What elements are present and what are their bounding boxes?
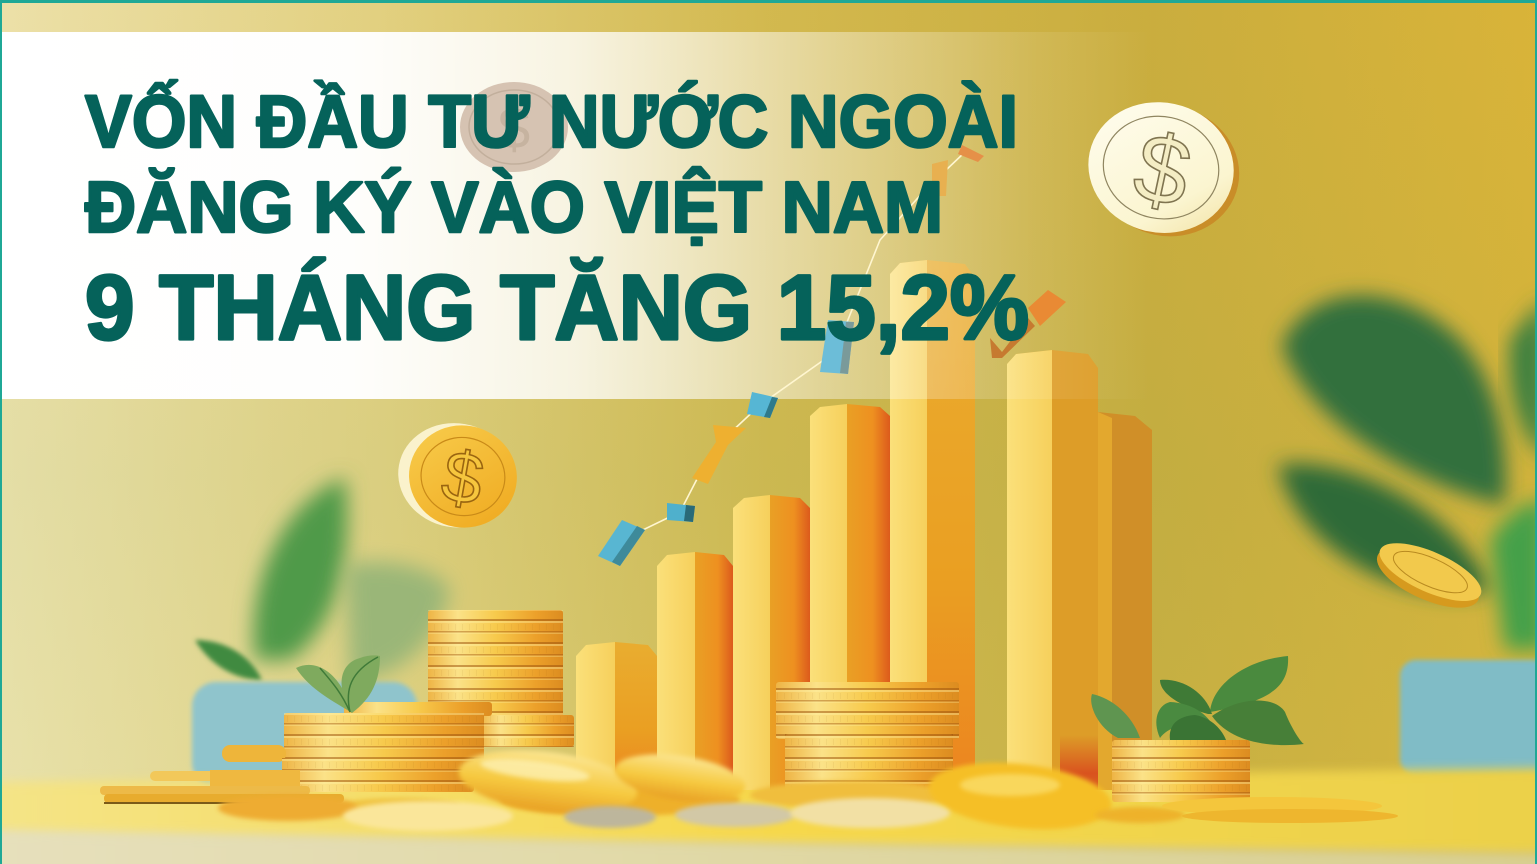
floating coin cream	[1076, 89, 1252, 250]
title panel	[0, 32, 1150, 399]
floating coin faded	[460, 82, 568, 172]
block 2	[667, 503, 695, 522]
title line 2: ĐĂNG KÝ VÀO VIỆT NAM	[85, 167, 943, 248]
title	[85, 80, 1029, 359]
coin stack tall	[428, 610, 574, 747]
floating coin gold	[390, 414, 525, 537]
column 5	[890, 260, 975, 790]
column 1	[576, 642, 657, 790]
sprout on left stack	[296, 655, 380, 713]
block 7 orange	[932, 160, 948, 196]
sprout on right stack	[1091, 656, 1304, 745]
block 6 orange	[1028, 290, 1066, 326]
block 5 orange	[692, 425, 746, 484]
floating coin tilted	[1369, 531, 1489, 620]
block 4	[820, 320, 854, 374]
blurred plant left	[192, 478, 450, 787]
foreground coins	[218, 741, 1398, 837]
floating coin faded: $	[498, 96, 530, 161]
table top	[0, 768, 1537, 855]
column 4	[810, 404, 890, 790]
column 3	[733, 495, 810, 790]
coin stack right	[1112, 740, 1250, 802]
coin stack centre	[776, 682, 959, 790]
floating coin cream: $	[1125, 113, 1200, 228]
bar chart columns	[576, 260, 1152, 790]
coin stack wide	[222, 702, 492, 792]
blurred plant right	[1278, 296, 1537, 775]
floating coin gold: $	[436, 436, 489, 521]
column 6	[1007, 350, 1098, 790]
rising trend line with blocks	[598, 145, 1066, 566]
title line 1: VỐN ĐẦU TƯ NƯỚC NGOÀI	[85, 80, 1018, 163]
flat coins left	[100, 770, 344, 804]
block 1	[598, 520, 645, 566]
table front edge	[0, 830, 1537, 864]
title line 3: 9 THÁNG TĂNG 15,2%	[85, 257, 1029, 359]
block 3	[747, 392, 778, 418]
column 2	[657, 552, 733, 790]
column 7	[1098, 412, 1152, 790]
